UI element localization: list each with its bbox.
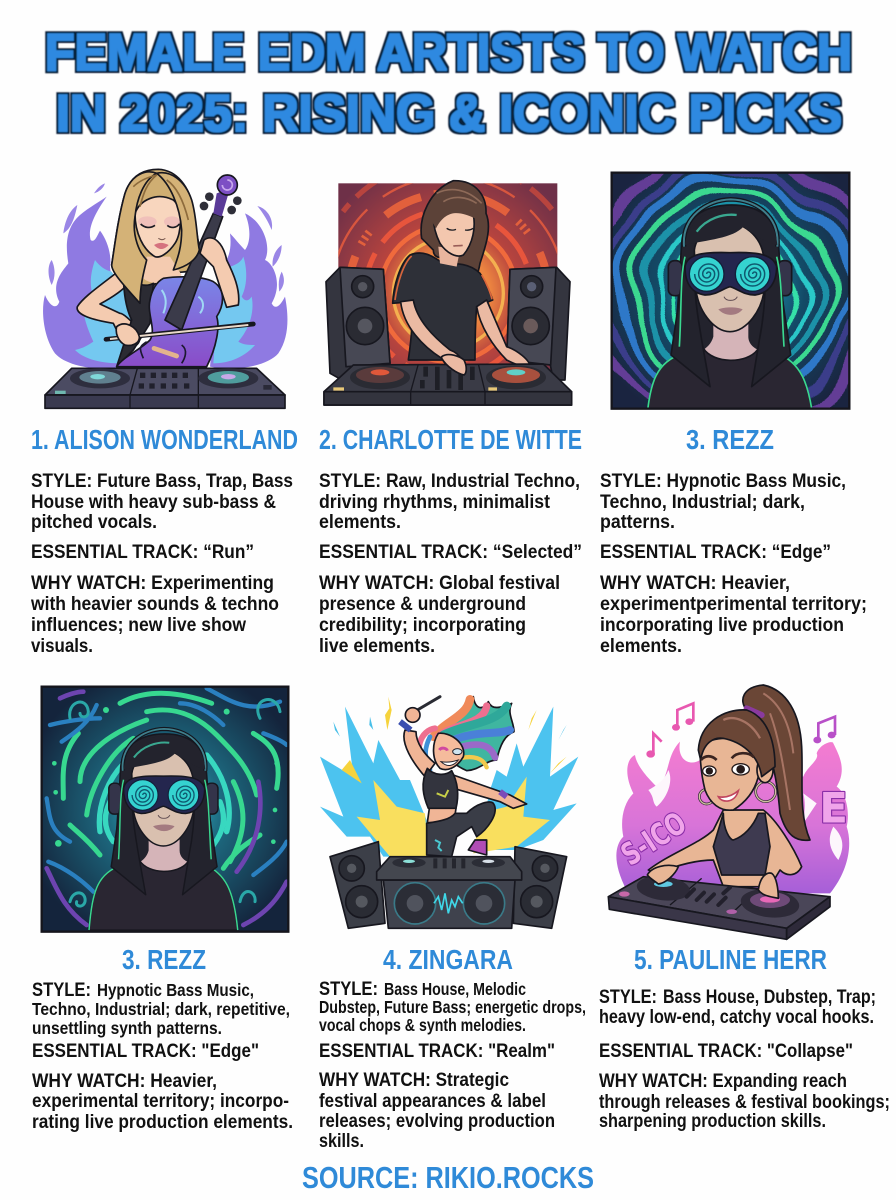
illustration: techno DJ with speakers and red backdrop [323,180,572,406]
illustration: Rezz with swirling green background [42,687,288,932]
artist description: visuals. [31,635,93,657]
illustration: dancing DJ with rainbow hair and lightning burst [320,697,578,928]
artist description: STYLE: [32,979,91,1001]
artist description [599,986,890,1132]
artist heading: 5. PAULINE HERR [634,944,827,975]
artist description: ESSENTIAL TRACK: “Run” [31,541,254,563]
artist description: Hypnotic Bass Music, [97,980,254,1000]
artist description: releases; evolving production [319,1110,555,1132]
artist description [600,470,867,657]
panel: Pauline Herr [599,685,890,1132]
panel: Charlotte de Witte [315,160,582,657]
artist description: WHY WATCH: Strategic [319,1069,509,1091]
artist description: patterns. [600,511,675,533]
artist description: influences; new live show [31,614,247,636]
artist description: rating live production elements. [32,1111,293,1133]
artist heading: 3. REZZ [122,944,206,975]
artist description: Techno, Industrial; dark, [600,491,805,513]
artist description: experimentperimental territory; [600,593,867,615]
artist description: ESSENTIAL TRACK: “Selected” [319,541,582,563]
artist description [319,978,586,1152]
artist description: sharpening production skills. [599,1110,826,1132]
artist description: incorporating live production [600,614,844,636]
illustration: DJ with ponytail, pink flames and music notes: E [819,784,848,833]
artist description: WHY WATCH: Global festival [319,572,560,594]
artist heading: 4. ZINGARA [383,944,513,975]
title: IN 2025: RISING & ICONIC PICKS [56,85,842,143]
artist description: Bass House, Melodic [384,979,526,999]
artist description: live elements. [319,635,435,657]
artist description: STYLE: [319,978,378,1000]
illustration: Rezz with spiral goggles on wavy rings [610,172,850,410]
artist description: vocal chops & synth melodies. [319,1015,526,1035]
artist description: credibility; incorporating [319,614,526,636]
artist description: elements. [319,511,401,533]
artist description: ESSENTIAL TRACK: "Realm" [319,1040,555,1062]
artist description: ESSENTIAL TRACK: "Collapse" [599,1040,853,1062]
artist heading: 3. REZZ [686,424,774,455]
artist description: experimental territory; incorpo- [32,1090,289,1112]
artist description: ESSENTIAL TRACK: "Edge" [32,1040,259,1062]
artist description [32,979,293,1133]
artist description: STYLE: Future Bass, Trap, Bass [31,470,293,492]
title: FEMALE EDM ARTISTS TO WATCH [45,24,852,82]
panel: Alison Wonderland [30,169,298,657]
artist description: festival appearances & label [319,1090,546,1112]
artist description: WHY WATCH: Heavier, [32,1070,217,1092]
source footer: SOURCE: RIKIO.ROCKS [302,1160,594,1195]
artist description: elements. [600,635,682,657]
panel: Rezz (bottom) [32,687,293,1133]
artist description: skills. [319,1130,364,1152]
artist heading: 1. ALISON WONDERLAND [31,424,298,455]
panel: Zingara [319,697,586,1152]
artist description: STYLE: Hypnotic Bass Music, [600,470,846,492]
artist description: Techno, Industrial; dark, repetitive, [32,999,290,1019]
rainbow hair [419,697,514,771]
artist description: WHY WATCH: Expanding reach [599,1070,847,1092]
artist description: STYLE: Raw, Industrial Techno, [319,470,580,492]
artist description: Dubstep, Future Bass; energetic drops, [319,997,586,1017]
artist description: WHY WATCH: Experimenting [31,572,274,594]
artist description: pitched vocals. [31,511,157,533]
graffiti lettering: S-ICO [615,806,693,873]
artist description: ESSENTIAL TRACK: “Edge” [600,541,831,563]
artist description: House with heavy sub-bass & [31,491,276,513]
artist description: presence & underground [319,593,526,615]
artist description [30,470,293,657]
artist heading: 2. CHARLOTTE DE WITTE [319,424,582,455]
illustration: cellist with purple flames and DJ deck [43,169,287,408]
illustration: DJ with ponytail, pink flames and music notes [608,685,849,939]
artist description: driving rhythms, minimalist [319,491,550,513]
artist description: unsettling synth patterns. [32,1018,222,1038]
icon: music notes [648,703,835,756]
artist description: STYLE: [599,986,657,1008]
artist description: with heavier sounds & techno [30,593,279,615]
title [45,24,852,143]
artist description [319,470,582,657]
panel: Rezz (top) [600,172,866,652]
artist description: WHY WATCH: Heavier, [600,572,790,594]
